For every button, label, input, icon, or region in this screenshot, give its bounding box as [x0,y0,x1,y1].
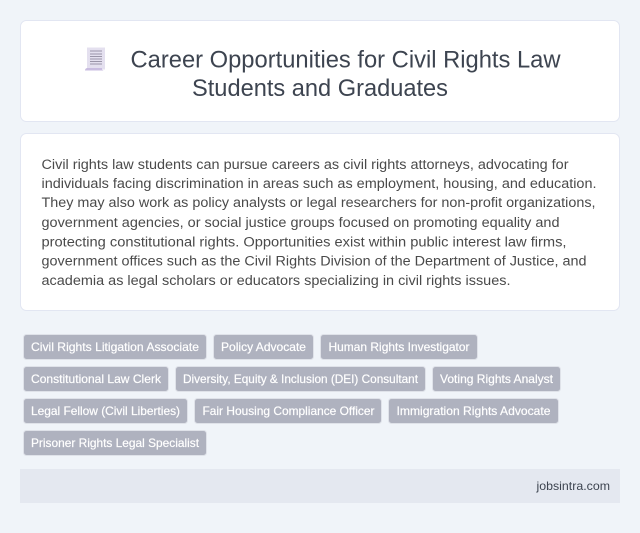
tag: Legal Fellow (Civil Liberties): Legal Fellow (Civil Liberties) [31,404,180,418]
tag: Immigration Rights Advocate [388,398,558,424]
tag: Diversity, Equity & Inclusion (DEI) Consultant: Diversity, Equity & Inclusion (DEI) Consultant [183,372,419,386]
tag: Fair Housing Compliance Officer [194,398,382,424]
tag: Voting Rights Analyst [432,366,560,392]
icon: scroll document [85,48,105,70]
description text: Civil rights law students can pursue careers as civil rights attorneys, advocating for [42,157,569,173]
description text: government agencies, or social justice groups focused on promoting equality and [42,215,560,231]
description text: individuals facing discrimination in areas such as employment, housing, and education. [42,176,596,192]
title [130,46,561,102]
description text: government offices such as the Civil Rights Division of the Department of Justice, and [42,254,586,270]
description text [42,157,596,289]
title: Students and Graduates [192,75,448,102]
tag: Diversity, Equity & Inclusion (DEI) Consultant [176,366,426,392]
tag: Civil Rights Litigation Associate: Civil Rights Litigation Associate [31,340,199,354]
panel: description [20,134,620,310]
tag: Voting Rights Analyst: Voting Rights Analyst [440,372,554,386]
tag: Prisoner Rights Legal Specialist [24,430,206,456]
description text: They may also work as policy analysts or legal researchers for non-profit organizations, [42,195,596,211]
tag: Prisoner Rights Legal Specialist: Prisoner Rights Legal Specialist [31,436,200,450]
footer bar [20,469,620,503]
tag: Constitutional Law Clerk [24,366,168,392]
panel: header [20,20,620,122]
tag: Human Rights Investigator: Human Rights Investigator [328,340,470,354]
tag list [24,334,560,456]
title: Career Opportunities for Civil Rights Law [130,46,561,74]
tag: Constitutional Law Clerk: Constitutional Law Clerk [31,372,162,386]
tag: Civil Rights Litigation Associate [24,334,206,360]
tag: Policy Advocate: Policy Advocate [221,340,306,354]
tag: Legal Fellow (Civil Liberties) [24,398,188,424]
description text: protecting constitutional rights. Opportunities exist within public interest law firms, [42,234,566,250]
tag: Immigration Rights Advocate: Immigration Rights Advocate [396,404,551,418]
description text: academia as legal scholars or educators specializing in civil rights issues. [42,273,510,289]
tag: Human Rights Investigator [320,334,478,360]
tag: Fair Housing Compliance Officer: Fair Housing Compliance Officer [202,404,374,418]
tag: Policy Advocate [214,334,314,360]
footer text: jobsintra.com: jobsintra.com [535,479,610,493]
